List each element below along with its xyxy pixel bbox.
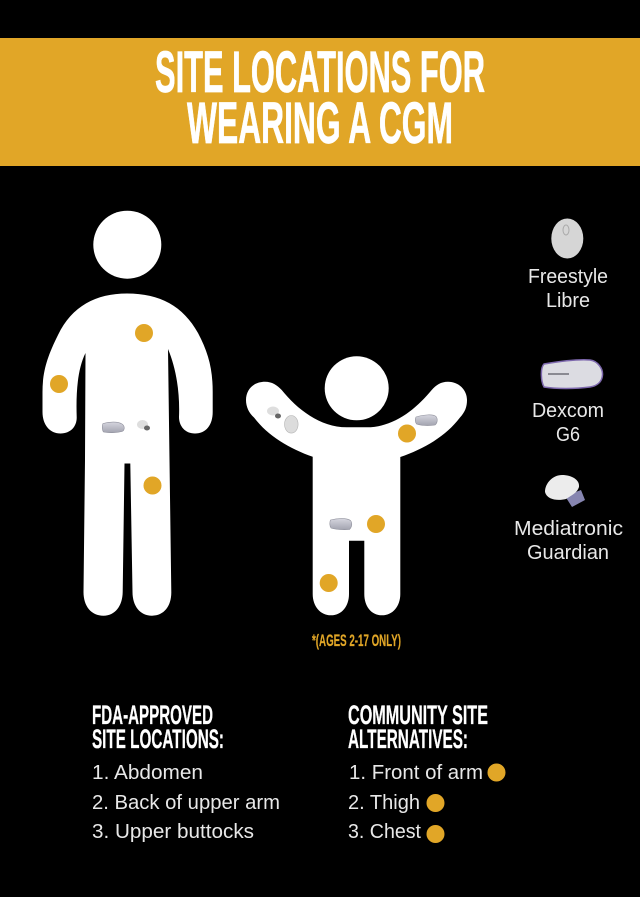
icon: Dexcom G6 sensor bbox=[541, 360, 603, 388]
label: Mediatronic Guardian: Mediatronic bbox=[514, 518, 623, 540]
title banner bbox=[0, 38, 640, 166]
list items bbox=[348, 762, 483, 843]
site marker: front of arm bbox=[50, 375, 68, 393]
head bbox=[325, 356, 389, 420]
list items: 2. Back of upper arm bbox=[92, 792, 280, 814]
heading: FDA-approved site locations bbox=[92, 700, 224, 754]
sensor: Libre on arm bbox=[284, 416, 298, 433]
heading: community site alternatives: COMMUNITY SITE bbox=[348, 700, 488, 730]
site marker: chest bbox=[135, 324, 153, 342]
list items: 3. Upper buttocks bbox=[92, 821, 254, 843]
label: Dexcom G6: G6 bbox=[556, 424, 580, 446]
heading: community site alternatives: ALTERNATIVES: bbox=[348, 724, 468, 754]
legend: Freestyle Libre bbox=[528, 218, 608, 312]
list items: 1. Abdomen bbox=[92, 762, 203, 784]
label: Freestyle Libre: Freestyle bbox=[528, 266, 608, 288]
sensor: Guardian on abdomen bbox=[137, 420, 150, 430]
community alternatives list bbox=[348, 700, 506, 843]
site marker: chest bbox=[398, 424, 416, 442]
adult figure bbox=[42, 211, 213, 616]
head bbox=[93, 211, 161, 279]
site marker: thigh bbox=[144, 476, 162, 494]
icon: Freestyle Libre sensor bbox=[551, 218, 583, 258]
icon: Guardian sensor bbox=[545, 475, 585, 507]
legend: Dexcom G6 bbox=[532, 360, 604, 446]
title bbox=[155, 40, 485, 156]
sensor: Dexcom on abdomen bbox=[330, 519, 352, 530]
list items: 1. Front of arm bbox=[349, 762, 483, 784]
child figure bbox=[246, 356, 467, 615]
heading: FDA-approved site locations: SITE LOCATIONS: bbox=[92, 724, 224, 754]
sensor: Dexcom on abdomen bbox=[102, 422, 124, 433]
sensor: Dexcom on upper arm bbox=[415, 415, 437, 426]
heading: community site alternatives bbox=[348, 700, 488, 754]
marker dots bbox=[426, 764, 506, 843]
label: Mediatronic Guardian bbox=[514, 518, 623, 564]
label: Dexcom G6 bbox=[532, 400, 604, 446]
site marker: thigh bbox=[320, 574, 338, 592]
label: Freestyle Libre bbox=[528, 266, 608, 312]
label: Mediatronic Guardian: Guardian bbox=[527, 542, 609, 564]
sensor: Guardian on arm bbox=[267, 406, 281, 418]
label: Dexcom G6: Dexcom bbox=[532, 400, 604, 422]
label: Freestyle Libre: Libre bbox=[546, 290, 590, 312]
list items: 3. Chest bbox=[348, 821, 421, 843]
FDA-approved list bbox=[92, 700, 280, 843]
heading: FDA-approved site locations: FDA-APPROVED bbox=[92, 700, 213, 730]
age note: *(AGES 2-17 ONLY) bbox=[312, 631, 401, 650]
site marker: abdomen bbox=[367, 515, 385, 533]
list items bbox=[92, 762, 280, 843]
legend: Mediatronic Guardian bbox=[514, 475, 623, 564]
list items: 2. Thigh bbox=[348, 792, 420, 814]
